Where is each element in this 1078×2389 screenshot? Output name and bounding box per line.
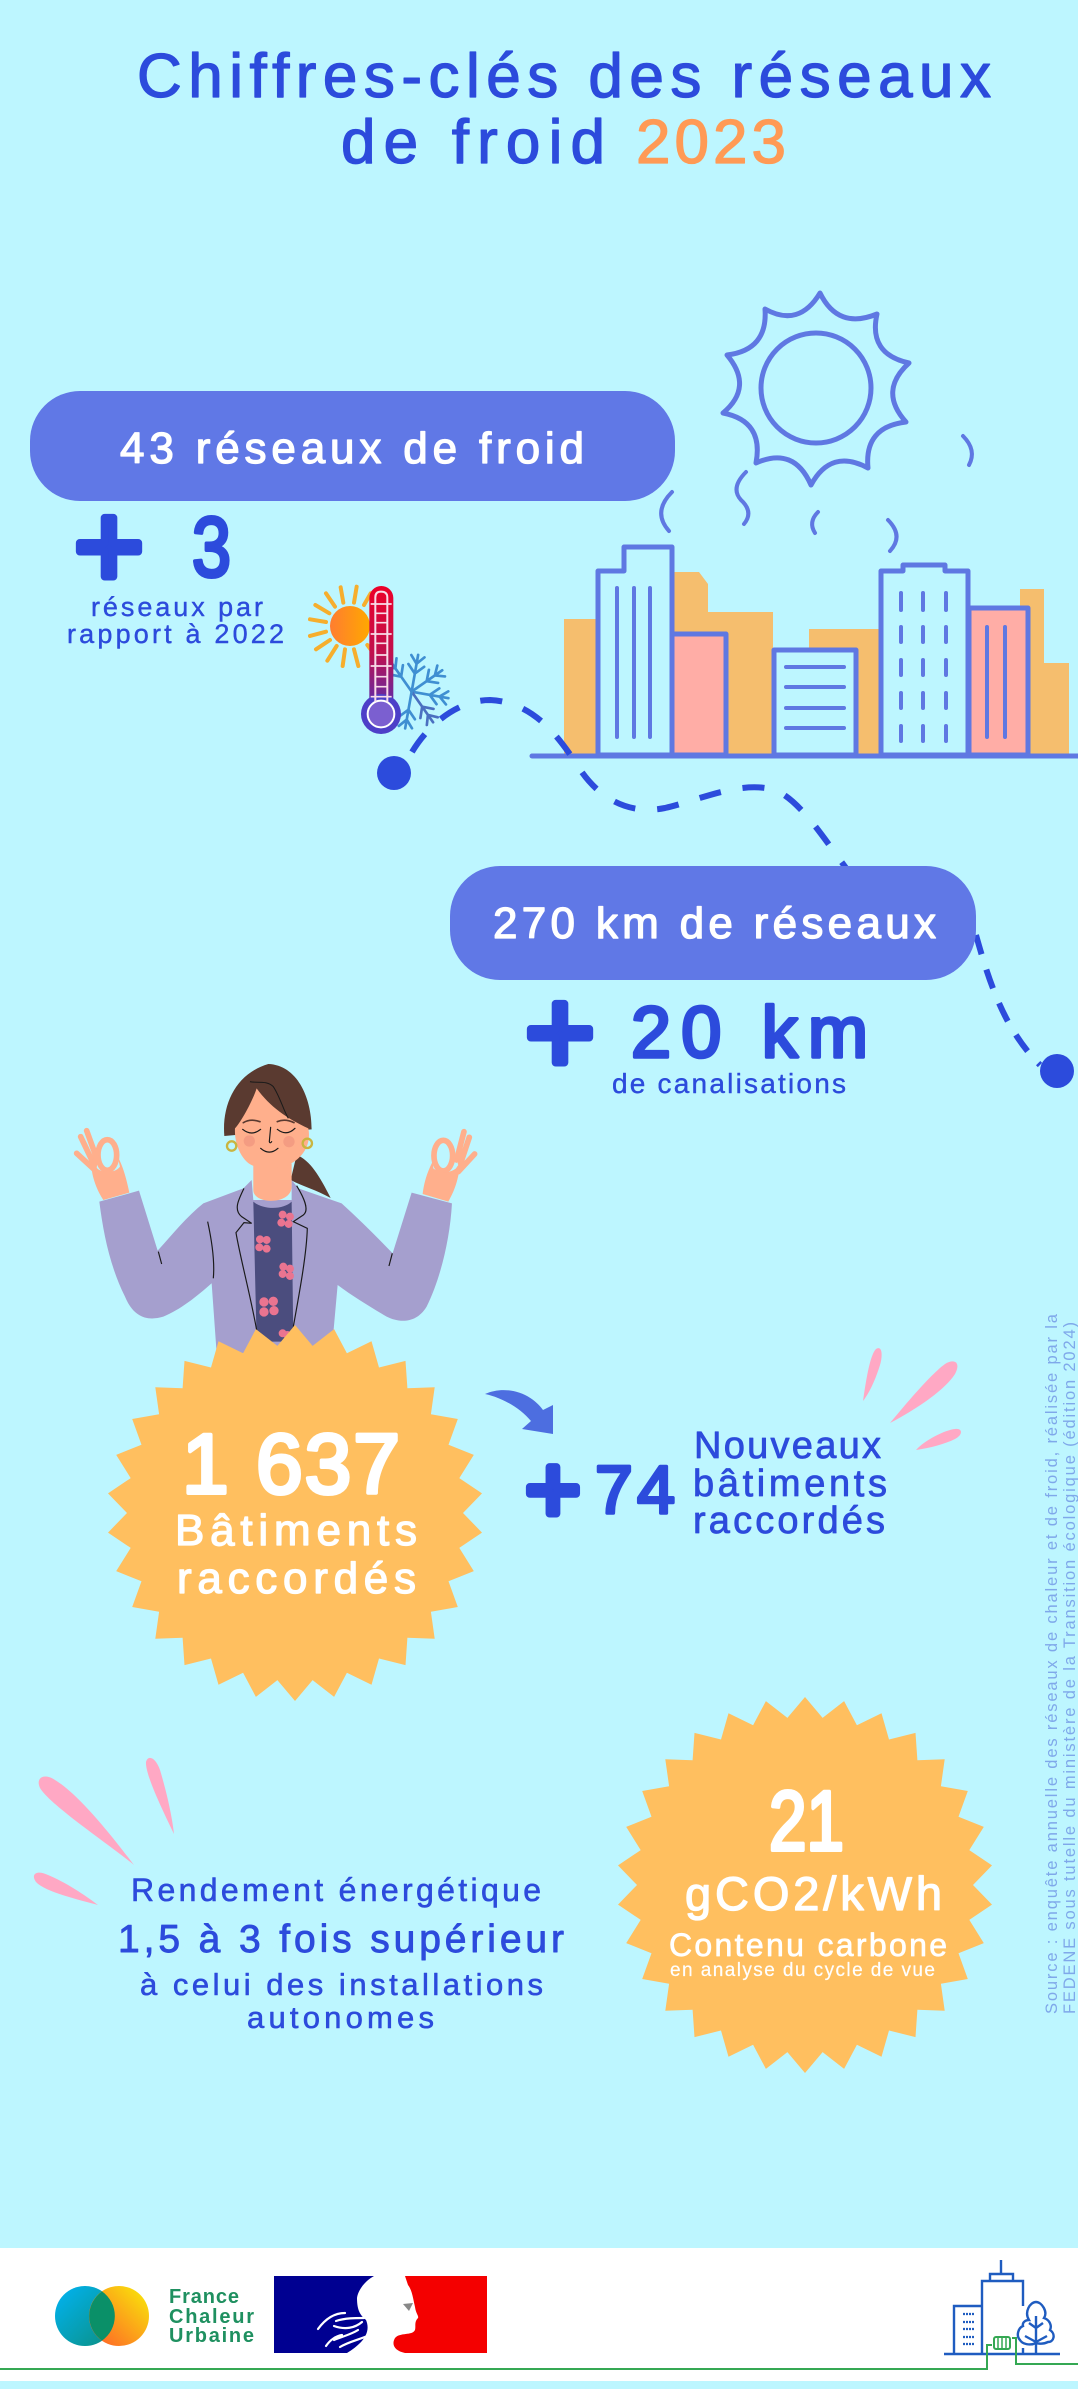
illustration: meditating woman bbox=[77, 1064, 475, 1353]
illustration: sun over city bbox=[532, 293, 1078, 756]
icon: thermometer with sun and snowflake bbox=[310, 586, 450, 734]
logo: France Chaleur Urbaine: Urbaine bbox=[169, 2325, 254, 2347]
stat: plus 74 new buildings: Nouveaux bbox=[694, 1425, 881, 1467]
footer band bbox=[0, 2248, 1078, 2381]
badge: 1 637 bâtiments raccordés bbox=[108, 1325, 482, 1701]
badge: 21 gCO2/kWh bbox=[618, 1697, 992, 2073]
dashed route 1 bbox=[412, 700, 846, 868]
panel: 270 km: 270 km de réseaux bbox=[493, 899, 936, 948]
stat: plus 74 new buildings: 74 bbox=[595, 1452, 675, 1528]
badge: 21 gCO2/kWh: Contenu carbone bbox=[669, 1927, 947, 1963]
title: 2023 bbox=[636, 108, 786, 177]
text block: rendement énergétique: Rendement énergétique bbox=[131, 1872, 541, 1908]
source note bbox=[1043, 1313, 1078, 2014]
decorative pink sparks left bbox=[34, 1758, 174, 1905]
stat: plus 20 km bbox=[525, 965, 868, 1099]
decorative pink sparks right bbox=[863, 1348, 961, 1450]
stat: plus 74 new buildings: + bbox=[525, 1437, 581, 1543]
logo: France Chaleur Urbaine bbox=[55, 2286, 254, 2347]
stat: plus 3: 3 bbox=[192, 500, 231, 594]
panel: 43 réseaux bbox=[30, 391, 675, 501]
route dot 1 bbox=[377, 756, 411, 790]
badge: 1 637 bâtiments raccordés: Bâtiments bbox=[175, 1506, 417, 1555]
text block: rendement énergétique: autonomes bbox=[247, 2000, 434, 2035]
heat waves bbox=[661, 436, 972, 551]
stat: plus 20 km: + bbox=[525, 965, 595, 1099]
panel: 270 km bbox=[450, 866, 976, 980]
title: Chiffres-clés des réseaux bbox=[137, 42, 991, 111]
route dot 2 bbox=[1040, 1054, 1074, 1088]
stat: plus 20 km: 20 km bbox=[631, 993, 868, 1073]
city buildings bbox=[532, 547, 1078, 756]
stat: plus 74 new buildings: raccordés bbox=[693, 1500, 885, 1542]
stat: plus 3: + bbox=[74, 479, 144, 613]
stat: plus 3 bbox=[67, 479, 284, 649]
stat: plus 20 km: de canalisations bbox=[612, 1068, 846, 1099]
logo: France Chaleur Urbaine: Chaleur bbox=[169, 2306, 254, 2328]
stat: plus 74 new buildings: bâtiments bbox=[693, 1463, 887, 1505]
text block: rendement énergétique: à celui des installations bbox=[140, 1967, 543, 2002]
icon: building, tree and radiator bbox=[0, 2260, 1078, 2369]
source note: Source : enquête annuelle des réseaux de chaleur et de froid, réalisée par la bbox=[1043, 1313, 1061, 2014]
icon: sun bbox=[723, 293, 909, 485]
title bbox=[137, 42, 991, 177]
badge: 21 gCO2/kWh: 21 bbox=[769, 1774, 844, 1868]
panel: 43 réseaux: 43 réseaux de froid bbox=[120, 424, 584, 473]
arrow bbox=[485, 1390, 553, 1434]
badge: 21 gCO2/kWh: gCO2/kWh bbox=[685, 1867, 942, 1920]
logo: République française bbox=[274, 2276, 487, 2353]
text block: rendement énergétique bbox=[118, 1872, 564, 2035]
stat: plus 74 new buildings bbox=[525, 1425, 887, 1543]
badge: 21 gCO2/kWh: en analyse du cycle de vue bbox=[670, 1960, 935, 1981]
text block: rendement énergétique: 1,5 à 3 fois supérieur bbox=[118, 1918, 564, 1961]
badge: 1 637 bâtiments raccordés: raccordés bbox=[177, 1554, 416, 1603]
stat: plus 3: réseaux par bbox=[91, 592, 263, 622]
logo: France Chaleur Urbaine: France bbox=[169, 2286, 239, 2308]
stat: plus 3: rapport à 2022 bbox=[67, 619, 284, 649]
title: de froid bbox=[341, 108, 605, 177]
badge: 1 637 bâtiments raccordés: 1 637 bbox=[182, 1417, 400, 1511]
dashed route 2 bbox=[976, 935, 1040, 1065]
